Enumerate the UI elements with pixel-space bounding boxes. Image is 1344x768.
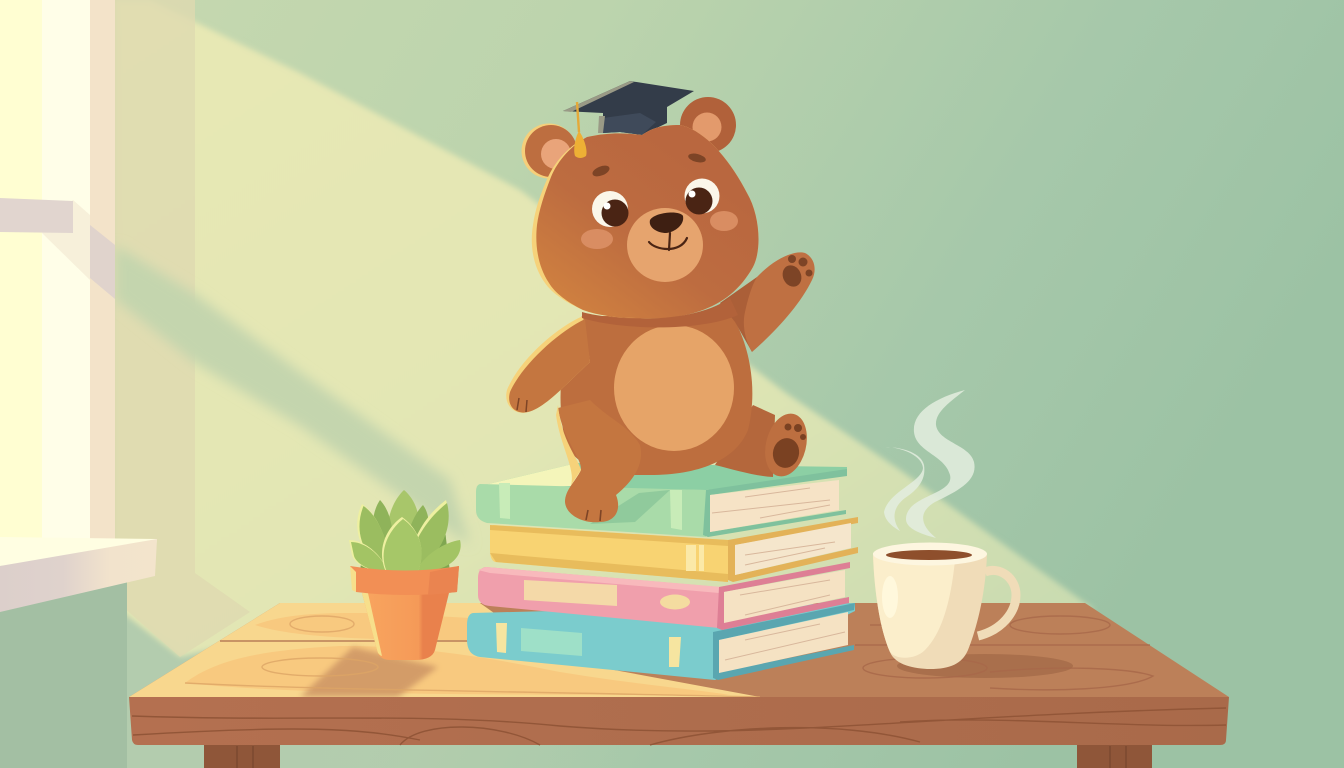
window mullion shadow band (115, 245, 470, 545)
cast shadow on table (300, 647, 438, 697)
yellow stripes (686, 545, 696, 571)
cup handle (978, 570, 1016, 636)
pink oval (660, 594, 690, 610)
mouth (649, 233, 687, 250)
bear belly (614, 325, 734, 451)
nose (650, 213, 683, 233)
yellow cover (490, 525, 728, 582)
window glass (0, 0, 42, 545)
blue cover (467, 603, 855, 680)
yellow pages (735, 523, 851, 575)
table legs (204, 745, 1152, 768)
brows (591, 163, 611, 179)
lower wall right of window (127, 600, 627, 768)
table top (129, 603, 1229, 697)
blue stripes (496, 623, 507, 653)
blue label (521, 628, 582, 656)
window (0, 0, 157, 612)
book stack (467, 463, 858, 680)
tassel (574, 102, 587, 158)
cheeks (581, 229, 613, 249)
succulent leaves (349, 490, 461, 572)
paw pad (779, 262, 805, 290)
pink label (524, 580, 617, 606)
bear left ear (522, 124, 577, 178)
bear right leg (715, 405, 775, 477)
pink book (478, 562, 850, 630)
bear front leg (558, 400, 641, 522)
window sill front (0, 539, 157, 612)
wall alcove shading strip (115, 0, 250, 657)
bear head (532, 125, 759, 327)
graduation cap (563, 81, 694, 135)
bear (506, 81, 815, 522)
lower wall panel (0, 580, 127, 768)
table (129, 603, 1229, 768)
mullion cast shadow (42, 200, 90, 280)
sunlit wood patches (185, 646, 730, 695)
cup highlight (882, 576, 898, 618)
coffee (886, 550, 972, 560)
table front edge (129, 697, 1229, 745)
blue book (467, 603, 855, 680)
yellow book (490, 517, 858, 582)
window crossbar (0, 198, 73, 233)
bear right foot (759, 409, 813, 481)
neck shadow (582, 298, 738, 327)
pink pages (724, 570, 845, 623)
front grain (132, 708, 1226, 745)
bear raised arm (720, 252, 815, 352)
pot body (362, 593, 449, 660)
pot rim (350, 566, 459, 595)
blue pages (719, 612, 848, 673)
right table shadow (897, 654, 1073, 678)
bear left arm (506, 316, 590, 413)
right eye (684, 178, 720, 214)
window sill top (0, 537, 157, 566)
green cover top (476, 463, 847, 490)
green pages (710, 480, 839, 532)
muzzle (627, 208, 703, 282)
cup rim (873, 542, 987, 566)
cup body (873, 553, 987, 669)
coffee cup (873, 390, 1016, 669)
sunlight beam on wall (100, 0, 1095, 657)
green book (476, 463, 847, 537)
steam (884, 390, 975, 538)
left eye (592, 191, 628, 227)
green spine (476, 484, 706, 537)
window frame (90, 0, 115, 545)
wood grain (185, 616, 1153, 697)
bear toe lines (586, 510, 601, 521)
bear body (561, 316, 752, 475)
green stripes (499, 483, 510, 519)
sunlit table area (129, 603, 760, 697)
pink cover (478, 567, 719, 628)
plant (349, 490, 461, 660)
bear right ear (680, 97, 736, 153)
foot shadow on book (590, 490, 670, 524)
